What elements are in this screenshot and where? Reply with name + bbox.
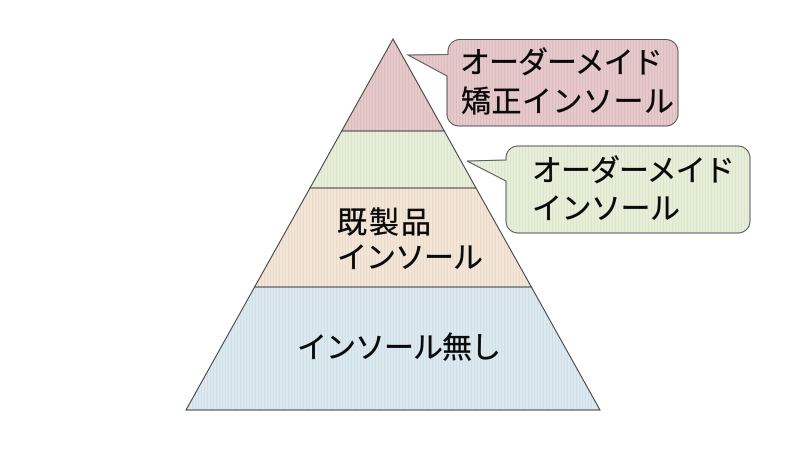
- tier 3 label: インソール: [337, 242, 482, 275]
- tier 4 label: インソール無し: [297, 332, 500, 365]
- tier 3: off-the-shelf insole: [255, 188, 531, 287]
- pyramid: [186, 39, 600, 410]
- tier 3 label: 既製品: [337, 207, 433, 240]
- callout: custom corrective insole: [408, 40, 678, 126]
- tier 1: custom corrective insole (top): [342, 39, 444, 131]
- callout text: 矯正インソール: [461, 86, 674, 119]
- callout text: オーダーメイド: [460, 47, 662, 80]
- tier 4: no insole (base): [186, 287, 600, 410]
- callout text: インソール: [532, 193, 680, 226]
- tier 2: custom insole: [310, 131, 476, 188]
- callout: custom insole: [467, 146, 750, 233]
- callout text: オーダーメイド: [532, 155, 734, 188]
